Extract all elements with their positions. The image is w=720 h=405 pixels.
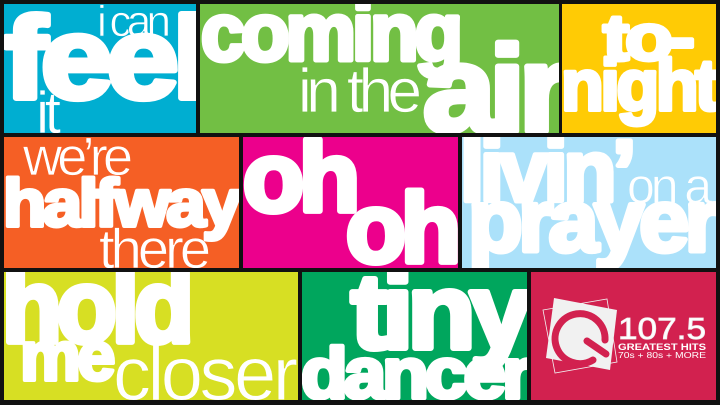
text: greatest hits: GREATEST HITS <box>618 342 706 353</box>
panel: i can feel it <box>4 4 196 133</box>
text: livin': livin’ <box>460 123 632 220</box>
text: there: there <box>99 217 211 280</box>
text: it: it <box>36 80 61 146</box>
text: hold: hold <box>2 249 189 365</box>
panel: to-night <box>561 1 719 133</box>
panel: livin' on a prayer <box>462 137 716 268</box>
text: tiny: tiny <box>351 253 532 371</box>
panel: tiny dancer <box>302 272 527 400</box>
text: prayer: prayer <box>468 171 718 270</box>
panel: hold me closer <box>4 272 298 400</box>
text: to-: to- <box>603 1 693 74</box>
text: halfway: halfway <box>3 166 241 241</box>
text: 107.5: 107.5 <box>618 311 706 346</box>
panel: we're halfway there <box>4 137 239 268</box>
text: night: night <box>561 46 719 126</box>
text: oh (lower): oh <box>346 173 456 283</box>
text: in the: in the <box>298 57 422 126</box>
text: air: air <box>423 21 568 157</box>
panel: oh oh <box>243 137 458 268</box>
text: me: me <box>20 317 114 395</box>
text: we're: we’re <box>22 127 133 187</box>
text: on a: on a <box>627 158 712 214</box>
text: oh (upper): oh <box>243 122 355 232</box>
icon: Q mark <box>543 298 617 373</box>
text: decades: 70s + 80s + MORE <box>618 350 706 360</box>
panel: coming in the air <box>200 4 559 133</box>
panel: Q107.5 logo <box>531 272 716 400</box>
